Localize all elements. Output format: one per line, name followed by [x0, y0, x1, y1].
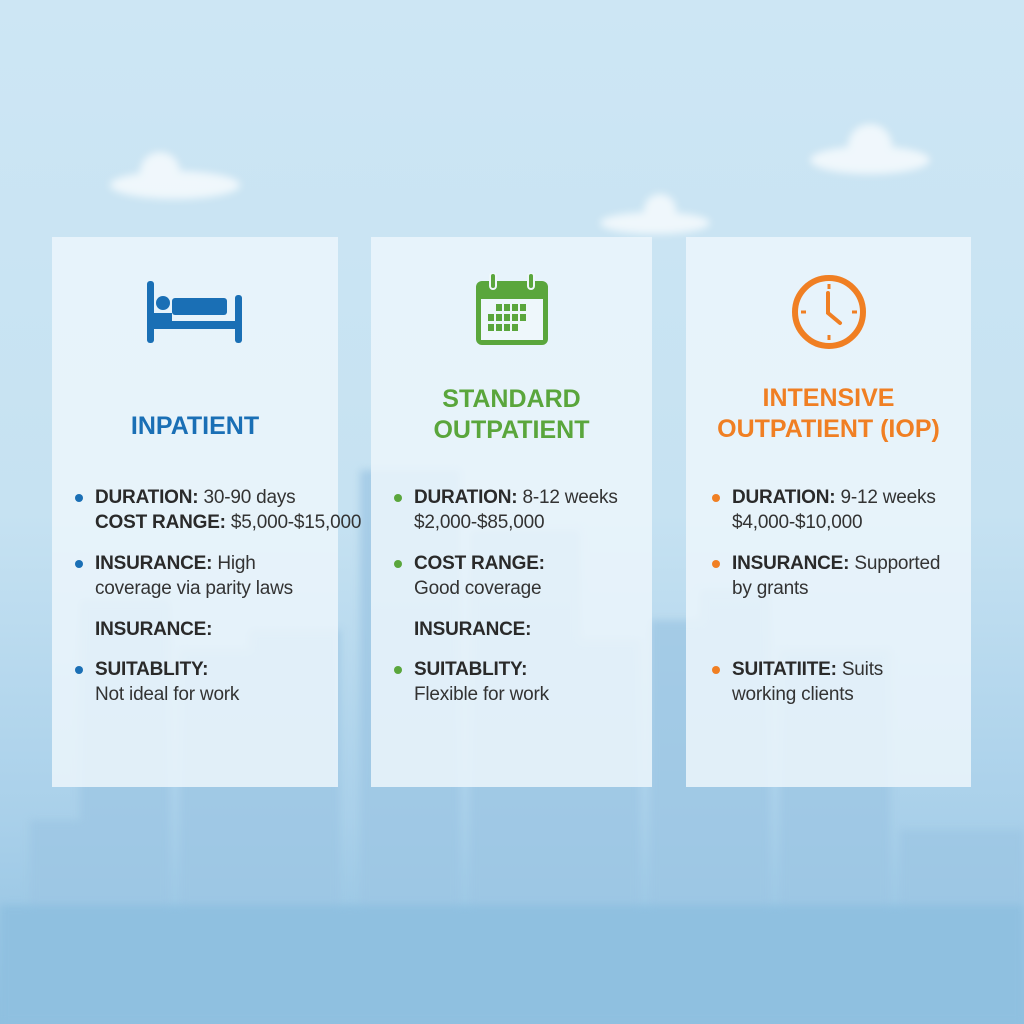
text block: details: $4,000-$10,000 [732, 512, 862, 533]
text block: details [75, 487, 361, 705]
text block: details: DURATION: 9-12 weeks [732, 487, 936, 508]
text block: details: INSURANCE: Supported [732, 553, 940, 574]
text block: details: SUITABLITY: [95, 659, 208, 680]
text block: details: DURATION: 30-90 days [95, 487, 295, 508]
icon: bed [147, 281, 242, 343]
text block: details: $2,000-$85,000 [414, 512, 544, 533]
text block: details: Not ideal for work [95, 684, 239, 705]
text block: details: COST RANGE: $5,000-$15,000 [95, 512, 361, 533]
text block: details: INSURANCE: High [95, 553, 256, 574]
text block: details: Good coverage [414, 578, 541, 599]
panel: inpatient [52, 237, 338, 787]
text block: details [394, 487, 618, 705]
text block: details: INSURANCE: [414, 619, 531, 640]
panel: standard outpatient [371, 237, 652, 787]
text block: details: by grants [732, 578, 808, 599]
panel: intensive outpatient [686, 237, 971, 787]
text block: details: INSURANCE: [95, 619, 212, 640]
text block: details: working clients [732, 684, 854, 705]
heading: OUTPATIENT [433, 416, 590, 444]
heading: STANDARD [442, 385, 581, 413]
heading [717, 384, 940, 443]
text block: details: Flexible for work [414, 684, 549, 705]
heading [433, 385, 590, 444]
text block: details: coverage via parity laws [95, 578, 293, 599]
heading: INPATIENT [131, 412, 259, 440]
icon: calendar [476, 274, 548, 345]
heading: OUTPATIENT (IOP) [717, 415, 940, 443]
text block: details: COST RANGE: [414, 553, 545, 574]
text block: details: DURATION: 8-12 weeks [414, 487, 618, 508]
text block: details: SUITABLITY: [414, 659, 527, 680]
text block: details: SUITATIITE: Suits [732, 659, 883, 680]
icon: clock [792, 275, 866, 349]
text block: details [712, 487, 940, 705]
heading: INTENSIVE [762, 384, 894, 412]
